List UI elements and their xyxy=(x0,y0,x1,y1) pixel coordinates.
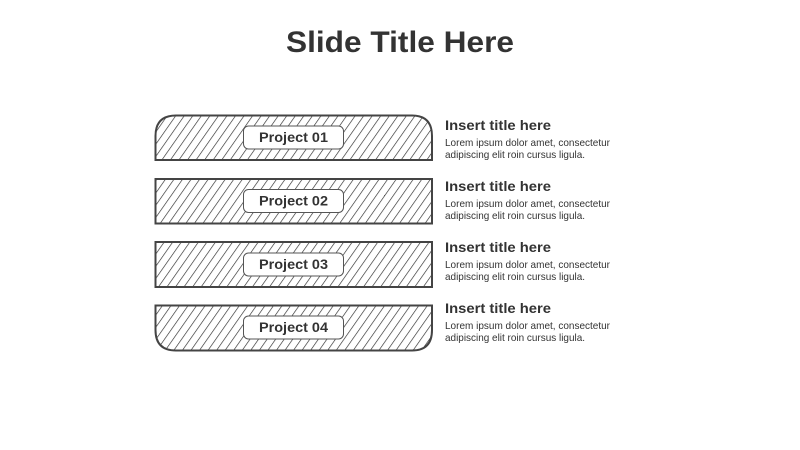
text 3: Insert title here xyxy=(445,239,551,255)
text 1: Lorem ipsum dolor amet, consectetur xyxy=(445,137,610,149)
text 2: Insert title here xyxy=(445,178,551,194)
label 2: Project 02 xyxy=(259,194,328,208)
row 1 xyxy=(156,116,610,161)
text 4 xyxy=(445,300,610,344)
text 1: Insert title here xyxy=(445,117,551,133)
text 4: Lorem ipsum dolor amet, consectetur xyxy=(445,320,610,332)
text 1: adipiscing elit roin cursus ligula. xyxy=(445,149,585,161)
label 1: Project 01 xyxy=(259,130,329,145)
row 3 xyxy=(156,239,610,287)
title: Slide Title Here xyxy=(286,26,514,59)
text 3: adipiscing elit roin cursus ligula. xyxy=(445,271,585,283)
label 3: Project 03 xyxy=(259,257,329,272)
label 1 xyxy=(244,126,344,149)
text 1 xyxy=(445,117,610,161)
bar 4 xyxy=(156,306,432,350)
label 3 xyxy=(244,253,344,276)
text 2: Lorem ipsum dolor amet, consectetur xyxy=(445,198,610,210)
text 2 xyxy=(445,178,610,222)
text 3 xyxy=(445,239,610,283)
row 4 xyxy=(156,300,610,350)
text 2: adipiscing elit roin cursus ligula. xyxy=(445,210,585,222)
label 4: Project 04 xyxy=(259,320,329,335)
bar 2 xyxy=(156,179,432,224)
label 4 xyxy=(244,316,344,339)
text 4: adipiscing elit roin cursus ligula. xyxy=(445,332,585,344)
text 4: Insert title here xyxy=(445,300,551,316)
row 2 xyxy=(156,178,610,224)
text 3: Lorem ipsum dolor amet, consectetur xyxy=(445,259,610,271)
bar 1 xyxy=(156,116,432,160)
label 2 xyxy=(244,190,344,212)
bar 3 xyxy=(156,242,432,287)
